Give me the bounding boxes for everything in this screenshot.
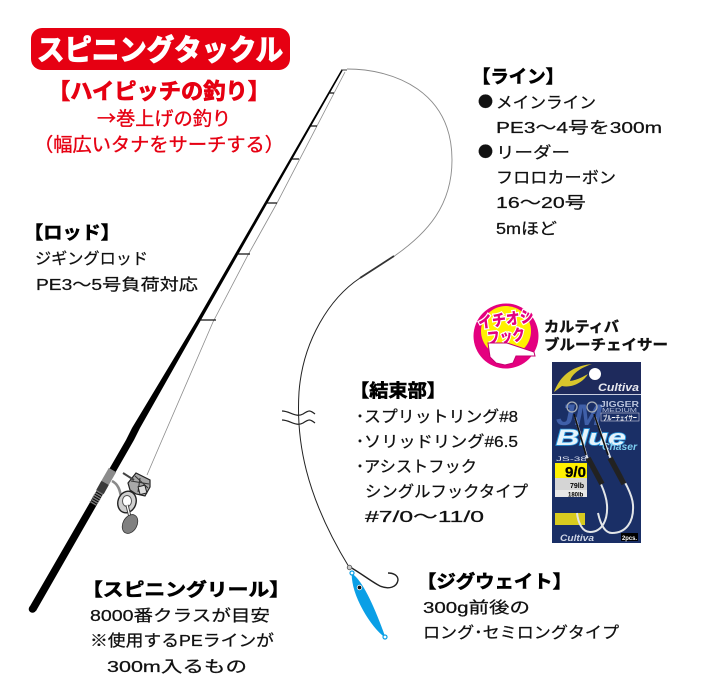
split ring [347, 565, 352, 570]
text block: knot: ･ [356, 409, 364, 426]
text block: line: フロロカーボン [496, 169, 616, 187]
recommended hook badge: フック [486, 326, 526, 348]
assist hook [350, 567, 398, 588]
text block: knot: ･ [356, 459, 364, 476]
reel handle [127, 505, 130, 517]
rear hook [595, 417, 633, 533]
text block: line: PE3～4号を300m [496, 119, 662, 137]
subtitle in red [34, 79, 284, 156]
text block: line: ● [478, 91, 493, 112]
icon: pointing hand [488, 343, 535, 365]
recommended hook badge [474, 304, 538, 368]
subtitle in red: （幅広いタナをサーチする） [34, 134, 284, 156]
text block: line: メインライン [496, 95, 596, 112]
text block: jig weight: 300g前後の [423, 599, 530, 617]
product name: カルティバ [544, 319, 620, 336]
text block: jig weight: ロング･セミロングタイプ [423, 624, 619, 642]
text block: line: 【ライン】 [472, 67, 564, 87]
line break mark [282, 411, 315, 424]
hook size box [555, 463, 587, 478]
text block: rod: PE3～5号負荷対応 [36, 276, 198, 294]
subtitle in red: 【ハイピッチの釣り】 [48, 79, 270, 104]
product package: hook card: JS-38 [556, 456, 588, 463]
yellow tag [555, 513, 585, 525]
brand name: Cultiva [598, 382, 639, 394]
reel foot [112, 481, 127, 507]
metal jig and assist hook [347, 565, 398, 639]
text block: knot: アシストフック [364, 458, 477, 476]
text block: knot: スプリットリング#8 [364, 408, 518, 426]
leader line [298, 278, 360, 567]
spec box [555, 478, 587, 490]
text block: knot: #7/0～11/0 [365, 509, 484, 526]
product name [544, 319, 668, 354]
text block: spinning reel: ※使用するPEラインが [90, 632, 274, 650]
text block: line: ● [478, 141, 493, 162]
rod blank [30, 70, 343, 611]
text block: knot: ソリッドリング#6.5 [364, 433, 518, 451]
badge text: イチオシ [477, 308, 535, 332]
fishing rod illustration [29, 70, 347, 613]
text block: spinning reel [82, 579, 290, 676]
reel seat [105, 470, 112, 483]
product package: hook card: MEDIUM [602, 408, 638, 414]
brand swoosh [554, 364, 592, 392]
product package: hook card: 2pcs. [622, 535, 637, 542]
line knot [360, 256, 394, 278]
card lower panel [552, 395, 641, 543]
product package: hook card: Blue [556, 425, 626, 450]
text block: knot: 【結束部】 [350, 381, 446, 401]
card footer: Cultiva [560, 533, 594, 543]
text block: line [472, 67, 662, 238]
product name: ブルーチェイサー [544, 336, 668, 354]
subtitle in red: →巻上げの釣り [97, 104, 231, 131]
text block: knot: ･ [356, 434, 364, 451]
product package: hook card: JIGGER [600, 400, 639, 409]
text block: spinning reel: 【スピニングリール】 [82, 579, 290, 600]
reel body [128, 473, 150, 496]
product package: hook card: 180lb [568, 492, 584, 498]
text block: rod: ジギングロッド [35, 250, 148, 268]
product package: hook card: 79lb [570, 483, 584, 490]
text block: rod [24, 223, 198, 294]
rod guides [200, 93, 334, 320]
spinning reel [112, 473, 150, 536]
jig rings [350, 571, 354, 575]
product logo: JM [556, 399, 603, 432]
main line [347, 69, 452, 257]
product package: hook card [552, 362, 641, 543]
text block: line: 16～20号 [496, 194, 586, 212]
text block: rod: 【ロッド】 [24, 223, 120, 243]
text block: jig weight: 【ジグウェイト】 [417, 571, 572, 592]
rod line through guides [147, 72, 345, 475]
text block: spinning reel: 8000番クラスが目安 [90, 607, 270, 625]
reel spool [115, 489, 139, 515]
text block: line: 5mほど [496, 220, 557, 238]
product package: hook card: Chaser [602, 442, 638, 453]
fishing line and leader [282, 69, 452, 567]
text block: knot [350, 381, 528, 526]
rod butt cap [29, 605, 36, 613]
text block: jig weight [417, 571, 619, 642]
front hook [575, 417, 607, 532]
text block: knot: シングルフックタイプ [365, 483, 528, 501]
card hole [589, 368, 601, 380]
jig body [352, 574, 385, 637]
product package: hook card: ブルーチェイサー [603, 413, 637, 422]
product package: hook card: 9/0 [565, 464, 586, 481]
jig eye [357, 585, 362, 590]
text block: line: リーダー [496, 144, 570, 162]
text block: spinning reel: 300m入るもの [107, 658, 247, 676]
title badge: スピニングタックル [37, 34, 283, 67]
